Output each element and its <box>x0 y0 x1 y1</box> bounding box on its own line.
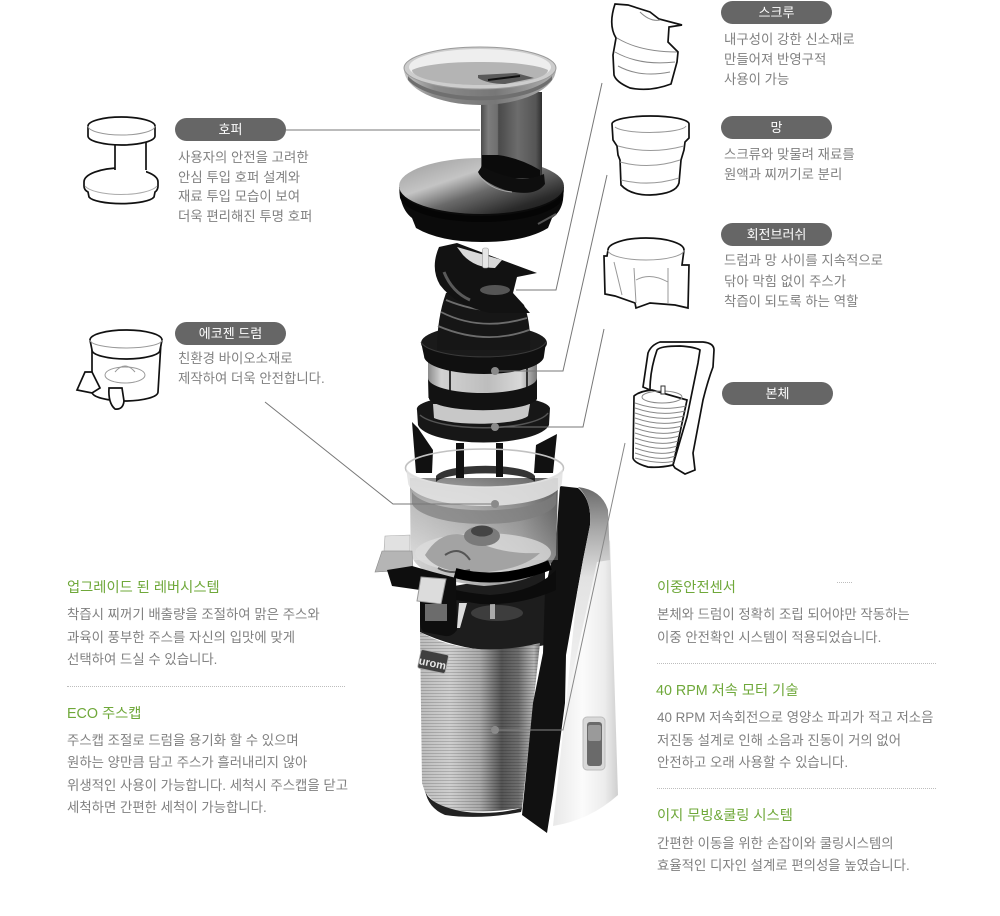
hopper feed tube <box>478 92 545 193</box>
label pill: 스크루 <box>721 1 832 24</box>
hopper part <box>399 47 564 242</box>
label pill: 호퍼 <box>175 118 286 141</box>
drum base <box>412 526 556 604</box>
description: 망 <box>724 147 855 182</box>
strainer front ring <box>421 342 546 374</box>
text: ECO 주스캡: 위생적인 사용이 가능합니다. 세척시 주스캡을 닫고 <box>67 778 348 792</box>
leader lines <box>265 83 625 730</box>
description: 스크루: 내구성이 강한 신소재로 <box>724 32 855 47</box>
text: 레버시스템: 착즙시 찌꺼기 배출량을 조절하여 맑은 주스와 <box>67 607 320 622</box>
label pill: 망: 망 <box>771 120 782 135</box>
description: 스크루: 사용이 가능 <box>724 72 789 87</box>
icon: brush <box>604 238 689 308</box>
description: 호퍼: 더욱 편리해진 투명 호퍼 <box>178 209 312 224</box>
description: 회전브러쉬: 드럼과 망 사이를 지속적으로 <box>724 253 883 268</box>
description: 망: 스크류와 맞물려 재료를 <box>724 147 855 162</box>
text: 40 RPM <box>657 710 933 770</box>
hopper base lid <box>399 158 564 242</box>
description: 스크루 <box>724 32 855 87</box>
lever <box>387 566 467 636</box>
label pill: 스크루: 스크루 <box>759 5 794 20</box>
label pill: 망 <box>721 116 832 139</box>
icon: main body <box>633 342 714 474</box>
text: 40 RPM: 40 RPM 저속회전으로 영양소 파괴가 적고 저소음 <box>657 710 933 725</box>
mesh filter band <box>428 362 537 398</box>
text: 이중안전센서: 본체와 드럼이 정확히 조립 되어야만 작동하는 <box>657 607 910 622</box>
label pill: 에코젠 드럼 <box>175 322 286 345</box>
label pill: 본체: 본체 <box>766 386 789 401</box>
description: 에코젠 드럼 <box>178 351 325 386</box>
text: 이지 무빙&쿨링: 효율적인 디자인 설계로 편의성을 높였습니다. <box>657 858 910 873</box>
icon: strainer <box>612 116 689 195</box>
description: 스크루: 만들어져 반영구적 <box>724 52 826 67</box>
silver front panel <box>553 487 618 826</box>
heading: 이지 무빙&쿨링: 이지 무빙&쿨링 시스템 <box>657 808 793 824</box>
drum rim <box>406 449 564 524</box>
heading: 40 RPM: 40 RPM 저속 모터 기술 <box>656 683 798 699</box>
rotating brush assembly <box>412 395 557 479</box>
brand badge <box>417 649 449 674</box>
text: ECO 주스캡: 주스캡 조절로 드럼을 용기화 할 수 있으며 <box>67 732 299 748</box>
icon: drum <box>77 330 162 409</box>
screw upper blade <box>435 243 537 313</box>
dark motor head <box>420 570 545 651</box>
heading: 이중안전센서: 이중안전센서 <box>657 580 736 596</box>
icon: screw <box>612 4 682 89</box>
text: 레버시스템: 과육이 풍부한 주스를 자신의 입맛에 맞게 <box>67 630 295 644</box>
hopper top tray <box>404 47 556 105</box>
black rear column <box>522 486 590 833</box>
heading: ECO 주스캡: ECO 주스캡 <box>67 706 141 722</box>
text: 레버시스템: 선택하여 드실 수 있습니다. <box>67 652 217 667</box>
text: 이지 무빙&쿨링: 간편한 이동을 위한 손잡이와 쿨링시스템의 <box>657 836 894 850</box>
text: 40 RPM: 저진동 설계로 인해 소음과 진동이 거의 없어 <box>657 732 901 748</box>
text: ECO 주스캡: 세척하면 간편한 세척이 가능합니다. <box>67 800 267 815</box>
label pill: 본체 <box>722 382 833 405</box>
description: 호퍼: 안심 투입 호퍼 설계와 <box>178 170 300 185</box>
text: ECO 주스캡 <box>67 732 348 815</box>
icon: hopper <box>84 117 158 204</box>
description: 호퍼: 재료 투입 모습이 보여 <box>178 189 300 204</box>
drum body <box>410 478 558 586</box>
description: 호퍼 <box>178 150 312 224</box>
description: 에코젠 드럼: 친환경 바이오소재로 <box>178 351 293 366</box>
description: 회전브러쉬: 착즙이 되도록 하는 역할 <box>724 294 858 309</box>
text: 40 RPM: 안전하고 오래 사용할 수 있습니다. <box>657 755 848 770</box>
leader dots <box>491 367 499 734</box>
description: 에코젠 드럼: 제작하여 더욱 안전합니다. <box>178 371 325 386</box>
ribbed metal housing <box>420 632 540 817</box>
description: 호퍼: 사용자의 안전을 고려한 <box>178 150 309 165</box>
text: 이중안전센서: 이중 안전확인 시스템이 적용되었습니다. <box>657 630 881 644</box>
description: 회전브러쉬: 닦아 막힘 없이 주스가 <box>724 274 846 288</box>
strainer lower ring <box>428 378 537 410</box>
outlet base disc <box>471 603 523 621</box>
drum spout <box>375 535 413 572</box>
text: 이중안전센서 <box>657 607 910 644</box>
description: 회전브러쉬 <box>724 253 883 309</box>
strainer back rim <box>421 325 547 361</box>
screw part <box>435 243 537 350</box>
label pill: 회전브러쉬 <box>721 223 832 246</box>
eco drum <box>375 449 564 636</box>
text: 레버시스템 <box>67 607 320 667</box>
brand badge: urom <box>418 655 447 673</box>
label pill: 호퍼: 호퍼 <box>219 122 242 137</box>
power switch <box>583 717 605 770</box>
screw lower spiral <box>437 285 530 350</box>
text: ECO 주스캡: 원하는 양만큼 담고 주스가 흘러내리지 않아 <box>67 755 307 770</box>
heading: 레버시스템: 업그레이드 된 레버시스템 <box>67 580 220 596</box>
label pill: 회전브러쉬: 회전브러쉬 <box>747 227 806 242</box>
label pill: 에코젠 드럼: 에코젠 드럼 <box>199 326 262 341</box>
strainer mesh <box>421 342 546 410</box>
description: 망: 원액과 찌꺼기로 분리 <box>724 167 842 182</box>
text: 이지 무빙&쿨링 <box>657 836 910 873</box>
main body base <box>417 486 618 833</box>
